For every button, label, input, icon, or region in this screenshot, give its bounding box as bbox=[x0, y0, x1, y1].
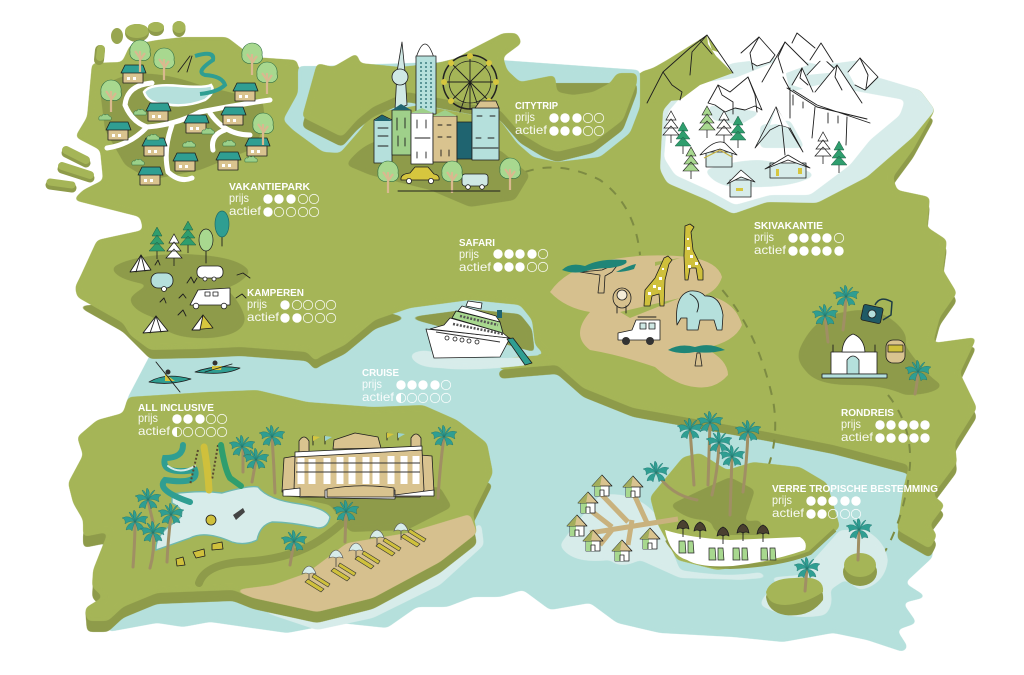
rating: citytrip: prijs bbox=[515, 110, 535, 124]
lagoon pool bbox=[156, 487, 330, 550]
ski lift bbox=[783, 77, 870, 145]
beach bbox=[233, 514, 477, 612]
teal spiral slide bbox=[163, 445, 196, 502]
hotel wings bbox=[282, 455, 434, 492]
green mountain bbox=[647, 35, 733, 103]
flag pennants blue bbox=[325, 433, 405, 441]
islets bbox=[766, 553, 877, 615]
panel: rondreis bbox=[798, 285, 942, 444]
rating: all inclusive bbox=[138, 402, 227, 438]
shaded ground bbox=[112, 254, 250, 338]
island shadow bbox=[670, 477, 765, 535]
tall giraffe bbox=[684, 224, 703, 280]
island edge bbox=[667, 530, 835, 567]
palm trees bbox=[812, 285, 931, 394]
water slide bbox=[195, 54, 225, 94]
water bbox=[100, 70, 933, 652]
rating: skivakantie: SKIVAKANTIE bbox=[754, 220, 823, 232]
safari jeep bbox=[618, 317, 660, 345]
rating: citytrip: CITYTRIP bbox=[515, 100, 558, 112]
piers bbox=[590, 490, 678, 545]
river bbox=[283, 60, 640, 162]
yellow slide bbox=[204, 447, 209, 490]
panel: vakantiepark bbox=[99, 40, 319, 218]
rating: cruise: prijs bbox=[362, 377, 382, 391]
beach foam bbox=[257, 522, 484, 630]
swimmers bbox=[206, 508, 245, 525]
panel: kamperen bbox=[112, 211, 336, 338]
shaded ground bbox=[100, 74, 264, 180]
rating: vakantiepark: prijs bbox=[229, 191, 249, 205]
pool loungers bbox=[176, 542, 223, 566]
hotel balconies bbox=[296, 463, 420, 472]
rating: verre tropische bestemming bbox=[772, 483, 938, 520]
kayaks bbox=[149, 360, 240, 392]
swimming pool bbox=[144, 85, 213, 105]
rating: rondreis: prijs bbox=[841, 417, 861, 431]
rating: rondreis: actief bbox=[841, 430, 874, 444]
grass strip bbox=[620, 258, 680, 318]
snow shadows bbox=[705, 60, 880, 187]
ship bbox=[426, 301, 510, 358]
panel: cruise bbox=[362, 301, 532, 404]
hotel main block bbox=[294, 450, 424, 497]
skyscraper bbox=[416, 44, 436, 114]
hotel white cornice bbox=[295, 446, 422, 457]
hotel roof pediment bbox=[333, 433, 381, 449]
acacia tree bbox=[562, 260, 636, 293]
camera bbox=[861, 299, 892, 324]
van bbox=[462, 174, 488, 189]
rating: citytrip bbox=[515, 100, 604, 137]
overwater bungalows bbox=[567, 475, 660, 561]
backpack bbox=[886, 340, 905, 363]
yellow taxi bbox=[401, 167, 439, 184]
dashed route bbox=[525, 168, 910, 578]
rating: all inclusive: prijs bbox=[138, 411, 158, 425]
lion bbox=[613, 288, 631, 313]
snow field edge bbox=[660, 57, 935, 214]
rating: cruise: actief bbox=[362, 390, 395, 404]
rating: kamperen bbox=[247, 287, 336, 324]
rating: vakantiepark: VAKANTIEPARK bbox=[229, 181, 310, 193]
city trees bbox=[378, 158, 520, 193]
rating: skivakantie: prijs bbox=[754, 230, 774, 244]
rating: verre tropische bestemming: prijs bbox=[772, 493, 792, 507]
back mountains bbox=[741, 33, 878, 103]
chalets bbox=[700, 142, 810, 197]
panel: skivakantie bbox=[647, 33, 935, 257]
rating: all inclusive: ALL INCLUSIVE bbox=[138, 402, 214, 414]
rating: cruise bbox=[362, 367, 451, 404]
trees bbox=[101, 40, 277, 145]
palm trees bbox=[643, 411, 872, 591]
holiday houses bbox=[106, 65, 270, 185]
rating: vakantiepark bbox=[229, 181, 319, 218]
slide towers bbox=[190, 445, 218, 485]
bushes bbox=[99, 109, 257, 165]
snow field bbox=[664, 62, 905, 205]
land: city peninsula bbox=[302, 33, 637, 152]
grass tufts bbox=[155, 260, 250, 316]
foam bbox=[410, 351, 530, 369]
ground contour bbox=[199, 520, 345, 583]
second acacia bbox=[668, 345, 725, 366]
houses row bbox=[374, 101, 499, 164]
land: south bbox=[68, 390, 493, 621]
panel: safari bbox=[459, 224, 742, 388]
pine trees bbox=[663, 106, 847, 179]
island bbox=[650, 453, 840, 570]
road bbox=[398, 190, 500, 192]
rating: safari: SAFARI bbox=[459, 237, 495, 249]
lagoon shallows bbox=[560, 494, 888, 617]
slide supports bbox=[178, 56, 192, 72]
land: north main bbox=[73, 35, 977, 549]
small giraffe bbox=[644, 256, 672, 306]
park roads bbox=[107, 83, 270, 180]
camper bbox=[190, 288, 230, 309]
hotel domes bbox=[299, 434, 421, 452]
front mountains bbox=[708, 77, 803, 155]
beach umbrellas bbox=[677, 520, 769, 544]
rating: skivakantie: actief bbox=[754, 243, 787, 257]
hotel ground floor bbox=[283, 488, 434, 499]
rating: skivakantie bbox=[754, 220, 844, 257]
rating: kamperen: actief bbox=[247, 310, 280, 324]
ferris wheel bbox=[441, 53, 499, 112]
hotel entrance bbox=[327, 486, 394, 497]
rating: cruise: CRUISE bbox=[362, 367, 399, 379]
rating: kamperen: prijs bbox=[247, 297, 267, 311]
land: city peninsula underside bbox=[302, 73, 637, 162]
sunbeds bbox=[305, 529, 426, 592]
caravans bbox=[151, 266, 223, 292]
shaded ground bbox=[798, 310, 942, 395]
taj mahal bbox=[822, 334, 887, 378]
panel: all inclusive bbox=[122, 402, 477, 612]
pine trees bbox=[149, 221, 196, 266]
land: north underside bbox=[77, 289, 977, 558]
parasols bbox=[302, 523, 408, 583]
land: south underside bbox=[83, 431, 493, 632]
rating: safari: prijs bbox=[459, 247, 479, 261]
gangway bbox=[507, 338, 532, 365]
hotel flags bbox=[313, 433, 398, 445]
rating: vakantiepark: actief bbox=[229, 204, 262, 218]
panel: citytrip bbox=[346, 42, 604, 207]
palm trees bbox=[122, 425, 457, 568]
flag pennants bbox=[313, 433, 394, 441]
shaded ground bbox=[346, 140, 530, 207]
green slide bbox=[221, 445, 241, 486]
rating: verre tropische bestemming: actief bbox=[772, 506, 805, 520]
hotel windows bbox=[301, 456, 416, 484]
rating: safari bbox=[459, 237, 548, 274]
rating: all inclusive: actief bbox=[138, 424, 171, 438]
rating: verre tropische bestemming: VERRE TROPISCHE BESTEMMING bbox=[772, 483, 938, 495]
rating: safari: actief bbox=[459, 260, 492, 274]
rating: rondreis: RONDREIS bbox=[841, 407, 894, 419]
panel: verre tropische bestemming bbox=[560, 411, 938, 617]
teal tree bbox=[215, 211, 229, 246]
tents bbox=[130, 255, 213, 333]
islets off the north-west coast bbox=[50, 21, 186, 188]
beach chairs bbox=[679, 541, 776, 560]
hotel bbox=[282, 433, 434, 499]
TV tower bbox=[392, 42, 408, 110]
sand area bbox=[550, 255, 742, 388]
rating: citytrip: actief bbox=[515, 123, 548, 137]
elephant bbox=[677, 291, 723, 330]
shaded ground bbox=[273, 487, 452, 532]
white beach bbox=[665, 530, 806, 566]
rating: rondreis bbox=[841, 407, 930, 444]
rating: kamperen: KAMPEREN bbox=[247, 287, 304, 299]
round tree bbox=[199, 229, 213, 263]
